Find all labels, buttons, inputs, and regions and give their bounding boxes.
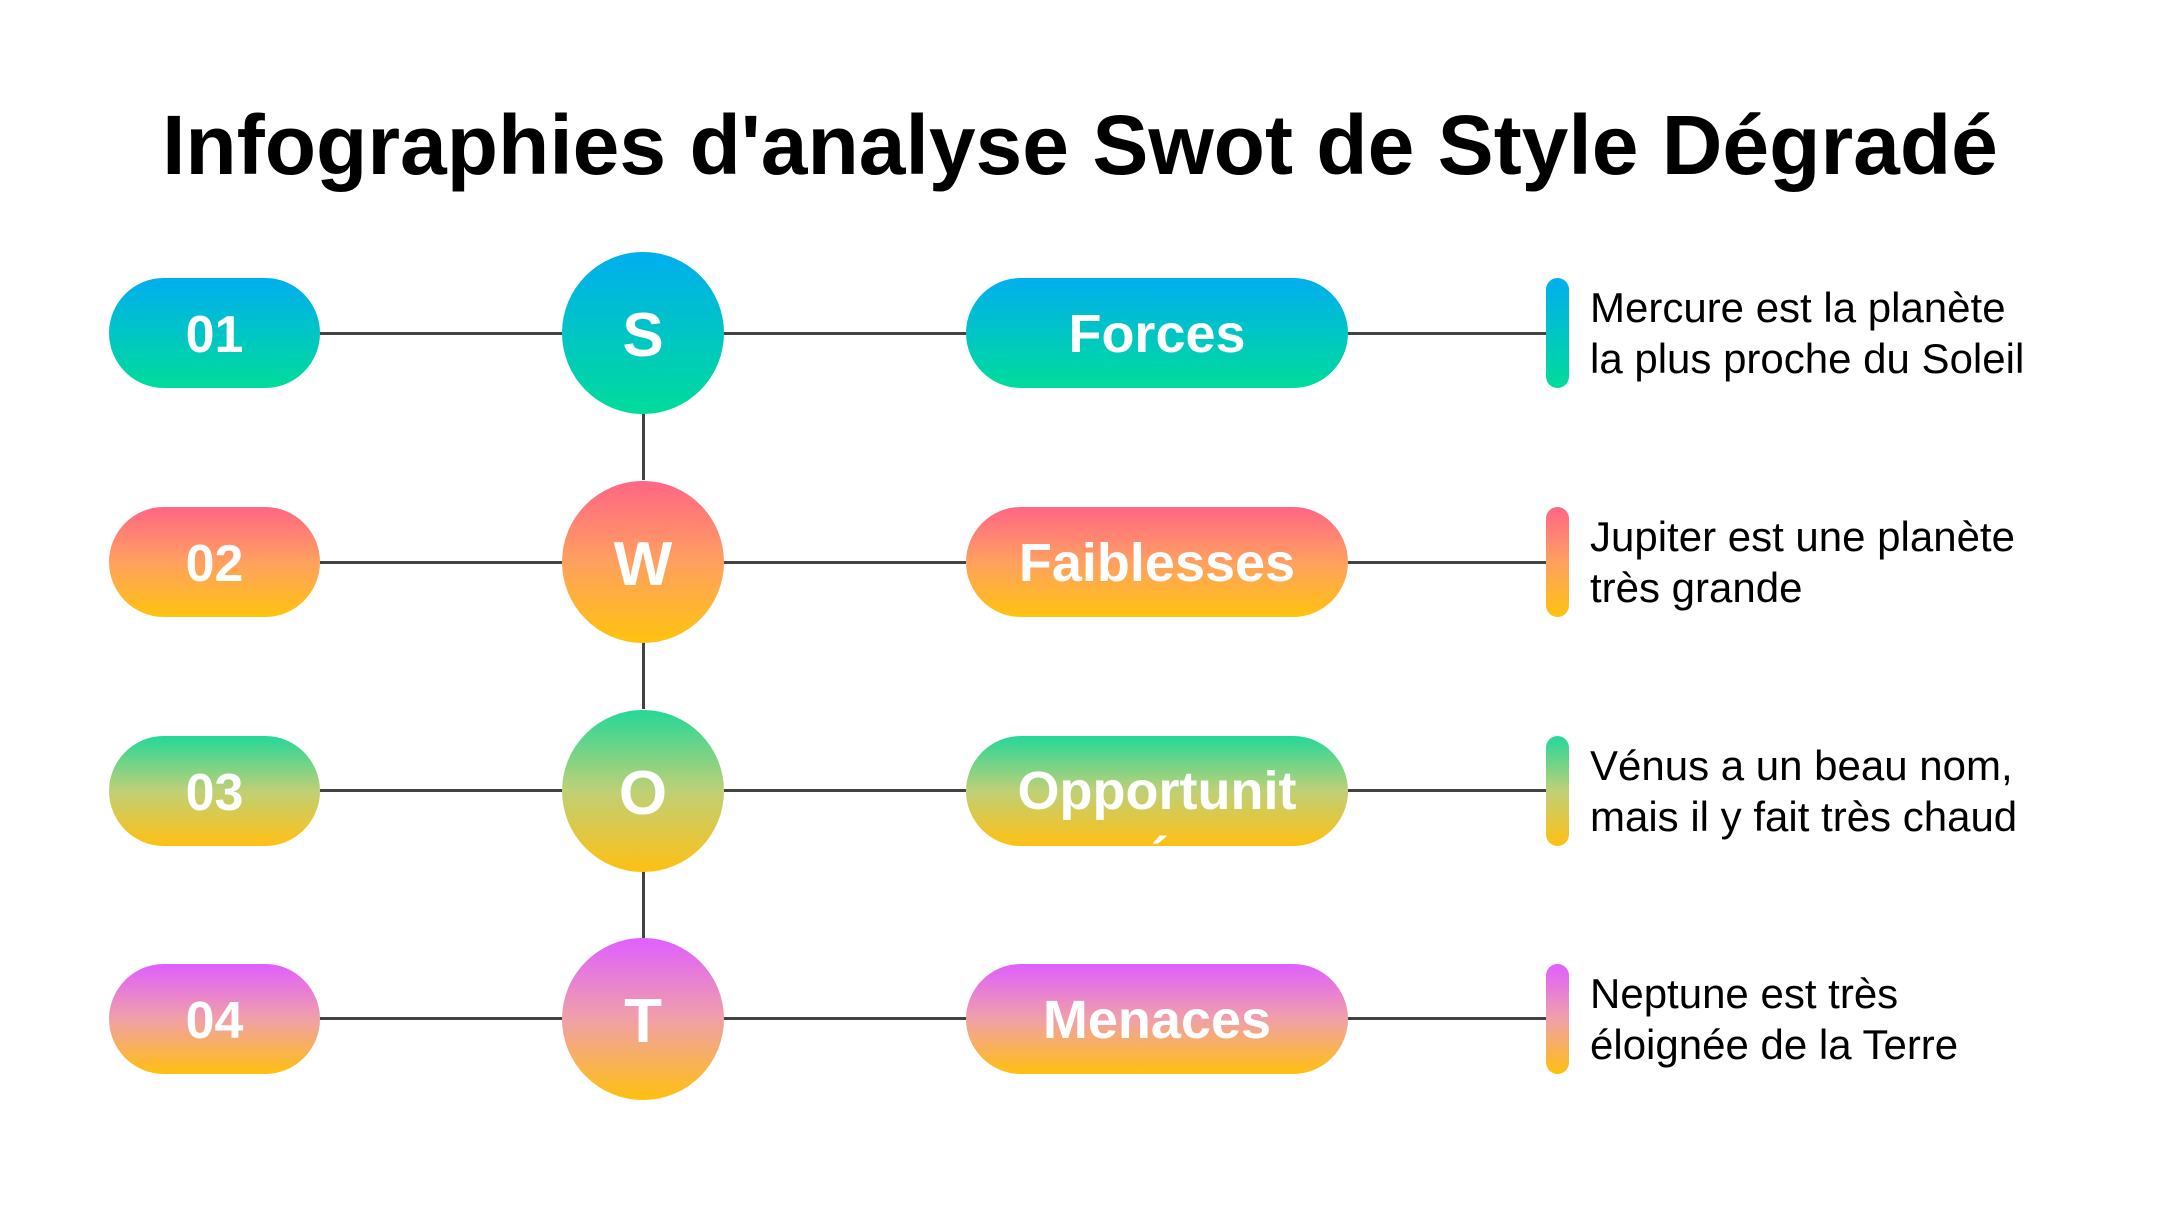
number pill 04: [109, 964, 320, 1074]
gradient bar: [1546, 736, 1569, 846]
label pill Forces: [966, 278, 1348, 388]
description: très grande: [1590, 564, 1802, 610]
label pill Menaces: [966, 964, 1348, 1074]
description: Jupiter est une planète: [1590, 512, 2015, 560]
label pill Opportunité, text wraps and clips: Opportunit: [1018, 761, 1296, 821]
number pill 03: [109, 736, 320, 846]
number pill 02: 02: [186, 535, 243, 593]
letter circle T: [562, 938, 724, 1100]
title: Infographies d'analyse Swot de Style Dégradé: [162, 98, 1998, 192]
description: éloignée de la Terre: [1590, 1020, 1958, 1068]
connector: S to W: [642, 410, 644, 480]
description: [1590, 742, 2017, 840]
connector: W to O: [642, 639, 644, 709]
number pill 04: 04: [186, 992, 243, 1050]
description: Mercure est la planète: [1590, 284, 2006, 330]
description: [1590, 284, 2024, 382]
number pill 02: [109, 507, 320, 617]
letter circle S: S: [622, 301, 664, 370]
letter circle W: W: [614, 530, 672, 599]
description: mais il y fait très chaud: [1590, 792, 2017, 840]
letter circle O: O: [619, 759, 667, 828]
label pill Opportunité, text wraps and clips: [966, 736, 1348, 846]
number pill 03: 03: [186, 764, 243, 822]
label pill Menaces: Menaces: [1043, 990, 1271, 1050]
description: [1590, 512, 2015, 610]
gradient bar: [1546, 507, 1569, 617]
label pill Faiblesses: Faiblesses: [1019, 533, 1295, 593]
row: Menaces: [109, 938, 1958, 1100]
label pill Forces: Forces: [1068, 304, 1246, 364]
label pill Faiblesses: [966, 507, 1348, 617]
number pill 01: 01: [186, 306, 243, 364]
letter circle W: [562, 481, 724, 643]
letter circle S: [562, 252, 724, 414]
description: Neptune est très: [1590, 970, 1898, 1016]
description: Vénus a un beau nom,: [1590, 742, 2013, 788]
row: Faiblesses: [109, 481, 2015, 643]
connector: O to T: [642, 868, 644, 938]
letter circle T: T: [624, 987, 662, 1056]
description: la plus proche du Soleil: [1590, 334, 2024, 382]
letter circle O: [562, 710, 724, 872]
row: Forces: [109, 252, 2024, 414]
gradient bar: [1546, 964, 1569, 1074]
gradient bar: [1546, 278, 1569, 388]
row: Opportunité: [109, 710, 2017, 872]
number pill 01: [109, 278, 320, 388]
description: [1590, 970, 1958, 1068]
